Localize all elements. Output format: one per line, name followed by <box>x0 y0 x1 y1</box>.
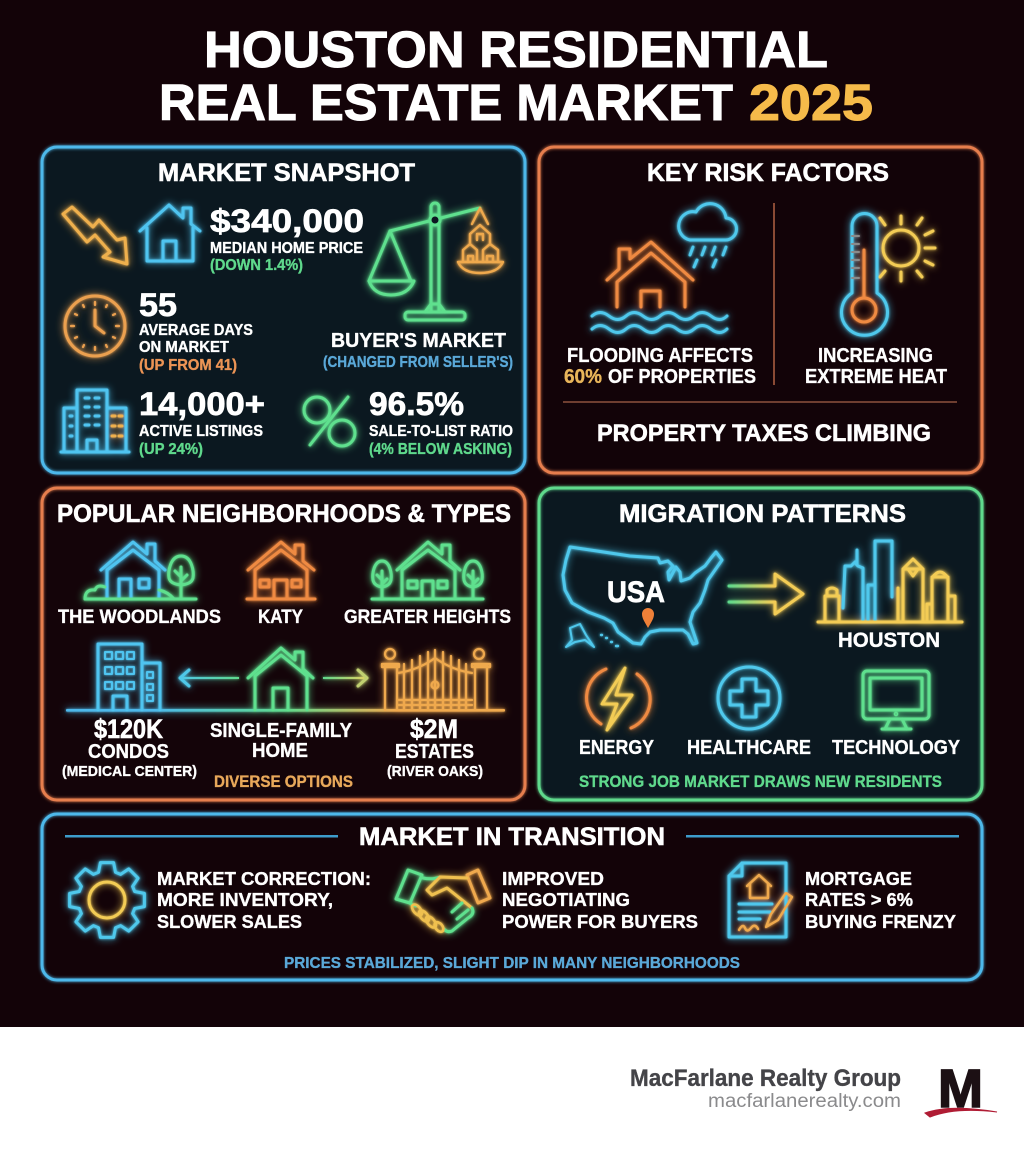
icon: gear <box>70 863 144 937</box>
text: flooding <box>564 345 756 388</box>
text: flooding: OF PROPERTIES <box>608 366 756 388</box>
stat: days on market: AVERAGE DAYS <box>139 322 253 339</box>
stat: sale-to-list ratio: (4% BELOW ASKING) <box>369 441 512 458</box>
label: healthcare: HEALTHCARE <box>687 737 811 759</box>
heading: popular neighborhoods: POPULAR NEIGHBORHOODS & TYPES <box>57 500 511 528</box>
logo: M with red swoosh <box>925 1059 997 1119</box>
stat: days on market: ON MARKET <box>139 339 229 356</box>
stat: sale-to-list ratio: SALE-TO-LIST RATIO <box>369 423 513 440</box>
icon: falling arrow <box>63 207 127 264</box>
label: single-family home: HOME <box>252 740 308 762</box>
panel: market in transition <box>42 814 982 980</box>
label: condos: CONDOS <box>88 741 169 763</box>
label: estates: ESTATES <box>395 741 474 763</box>
stat: active listings: (UP 24%) <box>139 441 203 458</box>
text: extreme heat: EXTREME HEAT <box>805 366 947 388</box>
icon: house <box>140 205 200 261</box>
label: buyer's market: BUYER'S MARKET <box>331 330 506 352</box>
arrow: toward estates <box>323 670 367 686</box>
icon: buildings <box>61 390 129 452</box>
text: market correction: MARKET CORRECTION: <box>157 869 371 889</box>
logo: M with red swoosh: M <box>938 1059 983 1119</box>
caption: job market: STRONG JOB MARKET DRAWS NEW RESIDENTS <box>579 772 942 791</box>
icon: technology monitor <box>863 671 929 729</box>
stat: sale-to-list ratio <box>369 386 513 458</box>
heading: key risk factors: KEY RISK FACTORS <box>647 159 889 187</box>
text: negotiating power <box>502 869 698 932</box>
panel: popular neighborhoods and types <box>42 488 525 800</box>
stat: active listings <box>139 386 265 458</box>
icon: houston skyline <box>818 541 962 622</box>
label: estates <box>387 714 483 780</box>
footer: company name: macfarlanerealty.com <box>708 1091 901 1112</box>
panel: market snapshot <box>42 147 525 473</box>
text: mortgage rates <box>805 869 956 932</box>
arrow: to houston <box>729 574 803 614</box>
text: negotiating power: POWER FOR BUYERS <box>502 912 698 932</box>
icon: healthcare <box>718 667 780 729</box>
panel: migration patterns <box>539 488 982 800</box>
text: negotiating power: NEGOTIATING <box>502 890 630 910</box>
text: mortgage rates: MORTGAGE <box>805 869 912 889</box>
footer: company name <box>630 1065 901 1112</box>
label: katy: KATY <box>258 607 303 628</box>
text: flooding: 60% <box>564 366 602 388</box>
heading: migration patterns: MIGRATION PATTERNS <box>619 500 906 528</box>
text: negotiating power: IMPROVED <box>502 869 604 889</box>
stat: median home price: $340,000 <box>210 203 364 239</box>
stat: days on market: 55 <box>139 287 177 323</box>
title: HOUSTON RESIDENTIAL <box>204 21 828 78</box>
icon: usa map <box>563 547 722 647</box>
label: single-family home <box>210 720 353 762</box>
label: buyer's market <box>323 330 513 371</box>
heading: market snapshot: MARKET SNAPSHOT <box>158 159 415 187</box>
heading: market in transition: MARKET IN TRANSITION <box>359 823 665 851</box>
label: condos: $120K <box>94 714 163 744</box>
label: estates: $2M <box>410 714 458 744</box>
icon: thermometer and sun <box>842 214 935 335</box>
icon: handshake <box>396 870 490 933</box>
icon: single-family house <box>248 648 313 710</box>
footer: company name: MacFarlane Realty Group <box>630 1065 901 1092</box>
icon: map pin <box>642 608 654 628</box>
text: flooding: FLOODING AFFECTS <box>567 345 753 367</box>
label: houston: HOUSTON <box>838 629 940 652</box>
label: buyer's market: (CHANGED FROM SELLER'S) <box>323 354 513 371</box>
ground line with property icons <box>66 644 505 712</box>
label: estates: (RIVER OAKS) <box>387 763 483 780</box>
title <box>159 21 873 131</box>
label: usa: USA <box>607 576 665 609</box>
text: extreme heat <box>805 345 947 388</box>
icon: flooded house <box>592 204 737 332</box>
stat: active listings: 14,000+ <box>139 386 265 422</box>
title: REAL ESTATE MARKET <box>159 74 733 131</box>
stat: median home price <box>210 203 364 274</box>
stat: days on market: (UP FROM 41) <box>139 357 237 374</box>
title: 2025 <box>749 74 873 131</box>
panel: key risk factors <box>539 147 982 473</box>
icon: estate gate <box>382 649 490 710</box>
stat: days on market <box>139 287 253 374</box>
text: market correction: SLOWER SALES <box>157 912 302 932</box>
label: energy: ENERGY <box>579 737 655 759</box>
icon: clock <box>65 296 125 356</box>
text: market correction: MORE INVENTORY, <box>157 890 333 910</box>
text: property taxes: PROPERTY TAXES CLIMBING <box>597 420 931 447</box>
label: condos <box>62 714 197 780</box>
text: market correction <box>157 869 371 932</box>
stat: median home price: MEDIAN HOME PRICE <box>210 240 363 257</box>
arrow: toward condos <box>180 670 239 686</box>
text: extreme heat: INCREASING <box>818 345 933 367</box>
label: diverse options: DIVERSE OPTIONS <box>214 772 353 791</box>
icon: energy <box>587 668 650 730</box>
icon: percent <box>304 397 355 446</box>
text: mortgage rates: RATES > 6% <box>805 890 913 910</box>
label: greater heights: GREATER HEIGHTS <box>344 607 511 628</box>
label: single-family home: SINGLE-FAMILY <box>210 720 353 742</box>
text: mortgage rates: BUYING FRENZY <box>805 912 956 932</box>
stat: active listings: ACTIVE LISTINGS <box>139 423 263 440</box>
stat: median home price: (DOWN 1.4%) <box>210 257 303 274</box>
caption: prices stabilized: PRICES STABILIZED, SLIGHT DIP IN MANY NEIGHBORHOODS <box>284 955 740 972</box>
icon: mortgage document <box>729 863 792 937</box>
label: condos: (MEDICAL CENTER) <box>62 763 197 780</box>
label: technology: TECHNOLOGY <box>832 737 961 759</box>
label: the woodlands: THE WOODLANDS <box>58 607 221 628</box>
icon: balance scale <box>369 203 503 320</box>
icon: woodlands house <box>85 542 196 599</box>
icon: katy house <box>247 542 315 599</box>
icon: condo tower <box>98 644 160 710</box>
stat: sale-to-list ratio: 96.5% <box>369 386 464 422</box>
icon: greater heights house <box>372 542 483 599</box>
